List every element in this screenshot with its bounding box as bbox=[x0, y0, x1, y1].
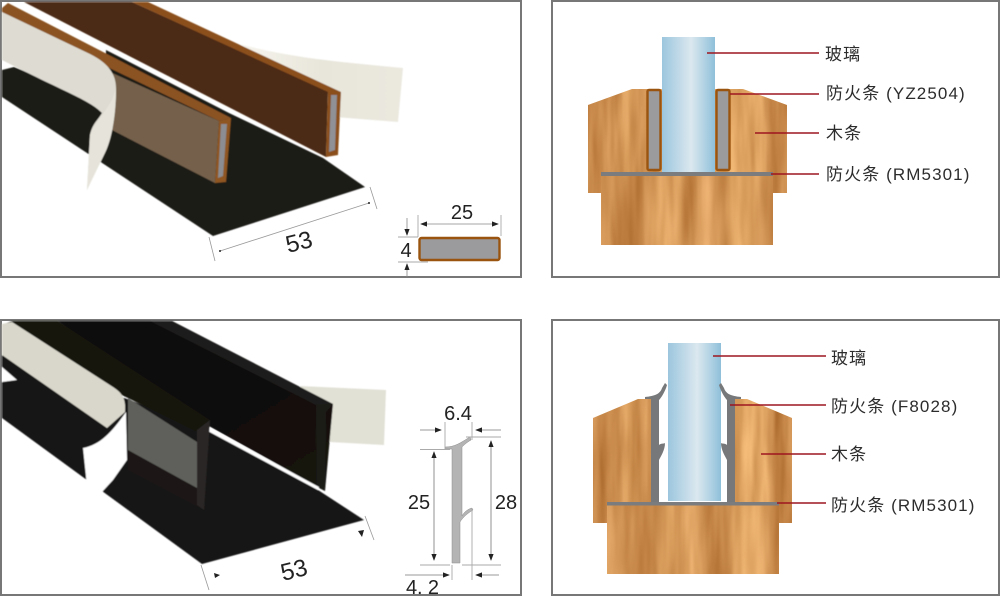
back release paper bbox=[300, 386, 386, 445]
label: wood: 木条 bbox=[826, 124, 862, 143]
panel: black T strip product photo bbox=[1, 320, 521, 596]
fire strip YZ2504 right bbox=[716, 90, 730, 170]
panel: section with F8028 strips bbox=[552, 320, 999, 595]
panel: brown strip product photo bbox=[1, 1, 521, 277]
section diagram: T strip profile bbox=[405, 403, 517, 596]
black sheet bbox=[2, 355, 364, 564]
wood base bbox=[607, 505, 779, 574]
photo: brown strips on black sheet with release paper bbox=[2, 2, 403, 236]
dimension: sheet width 53: 53 bbox=[283, 226, 315, 259]
white notch at left edge bbox=[2, 367, 17, 382]
wood frame section bbox=[593, 395, 792, 523]
black sheet bbox=[2, 50, 365, 236]
back brown strip bbox=[24, 2, 341, 157]
section diagram: T strip profile: 28 bbox=[495, 492, 517, 514]
fire strip RM5301 bbox=[601, 172, 773, 176]
label: RM5301: 防火条 (RM5301) bbox=[831, 496, 976, 515]
wood frame section bbox=[588, 89, 787, 193]
white gap between strips bbox=[204, 426, 319, 490]
front brown strip bbox=[2, 3, 231, 183]
label: F8028: 防火条 (F8028) bbox=[831, 397, 958, 416]
back T strip bbox=[58, 321, 333, 491]
dimension: sheet width 53 bbox=[201, 516, 374, 590]
label: glass: 玻璃 bbox=[825, 45, 861, 64]
back release paper bbox=[240, 44, 403, 122]
label: wood: 木条 bbox=[831, 445, 867, 464]
glass bbox=[668, 343, 721, 501]
wood base bbox=[601, 176, 773, 245]
fire strip F8028 right bbox=[719, 383, 741, 502]
dimension lines bbox=[420, 422, 501, 580]
dimension: sheet width 53: 53 bbox=[278, 554, 310, 587]
photo: black T strips on black sheet with release paper bbox=[2, 321, 386, 564]
label: YZ2504: 防火条 (YZ2504) bbox=[826, 84, 966, 103]
section diagram: strip 25 x 4 bbox=[398, 202, 501, 277]
panel: section with YZ2504 strips bbox=[552, 1, 999, 277]
front T strip bbox=[2, 321, 210, 510]
glass bbox=[662, 37, 715, 172]
dimension: sheet width 53 bbox=[209, 187, 377, 261]
section diagram: strip 25 x 4: 4 bbox=[400, 240, 412, 262]
leader lines bbox=[707, 53, 819, 174]
label: glass: 玻璃 bbox=[831, 349, 867, 368]
front release paper curl bbox=[2, 12, 116, 190]
fire strip F8028 left bbox=[645, 383, 667, 502]
section diagram: strip 25 x 4: 25 bbox=[451, 202, 473, 224]
section diagram: T strip profile: 6.4 bbox=[444, 403, 472, 425]
section diagram: T strip profile: 25 bbox=[408, 492, 430, 514]
fire strip YZ2504 left bbox=[648, 90, 660, 170]
fire strip RM5301 bbox=[607, 502, 779, 506]
strip profile bbox=[445, 437, 473, 563]
label: RM5301: 防火条 (RM5301) bbox=[826, 165, 971, 184]
front release paper curl bbox=[2, 322, 125, 428]
leader lines bbox=[713, 356, 826, 503]
